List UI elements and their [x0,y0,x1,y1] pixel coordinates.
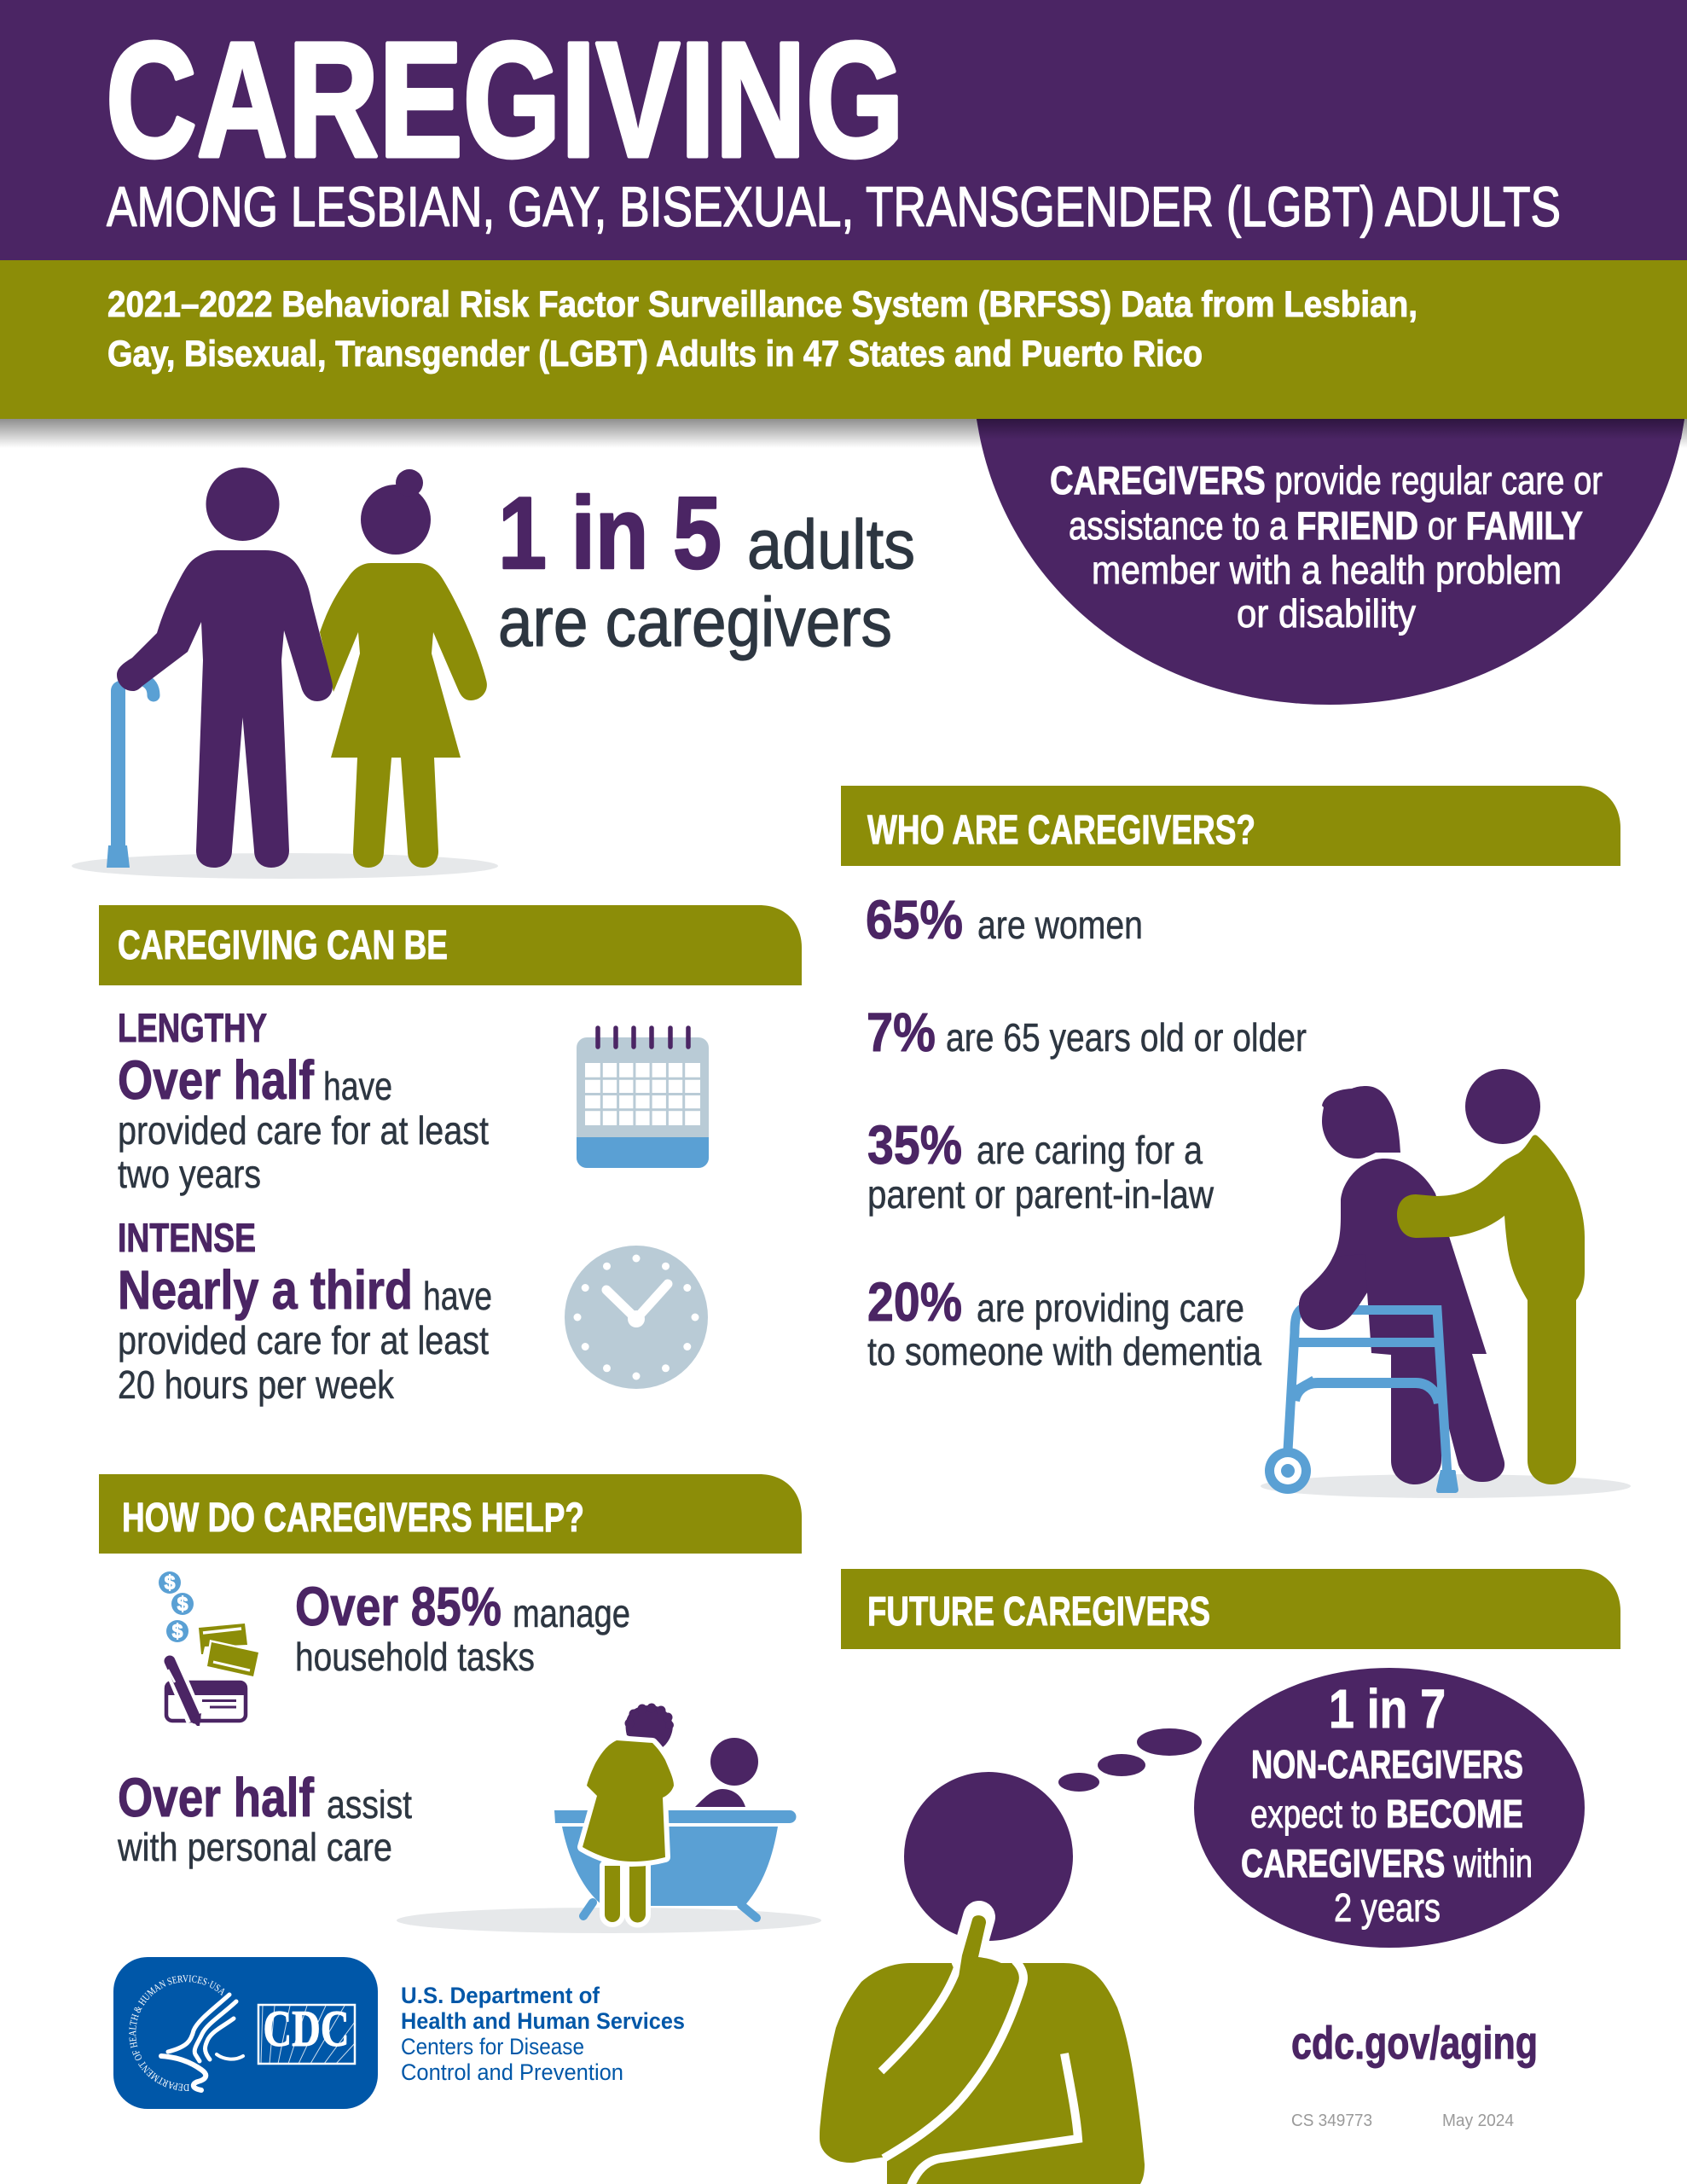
stat: 1 in 5 adults: 1 in 5 [498,476,722,590]
text block: agency names [401,1983,685,2085]
stat: 7 percent 65 or older: 7% [867,1002,936,1063]
stat: over 85 percent manage household tasks: manage [513,1591,630,1635]
icon: thinking person [820,1772,1145,2184]
stat: 35 percent caring for a parent: parent or parent-in-law [867,1172,1215,1217]
stat: 65 percent women [866,889,1143,950]
text block: agency names: U.S. Department of [401,1983,600,2008]
text block: lengthy: have [323,1064,392,1108]
website link text: cdc.gov/aging [1291,2018,1538,2069]
icon: money, cards and check: $ [177,1593,188,1615]
text block: agency names: Health and Human Services [401,2008,685,2034]
text block: lengthy [118,1005,489,1196]
publication code: CS 349773 [1291,2111,1372,2130]
text block: lengthy: two years [118,1152,261,1196]
icon: calendar [577,1028,709,1168]
text block: lengthy: provided care for at least [118,1108,489,1153]
heading: how do caregivers help [99,1474,802,1554]
heading: future caregivers: FUTURE CAREGIVERS [867,1589,1210,1635]
icon: clock [565,1246,708,1389]
heading: future caregivers [841,1569,1620,1649]
stat: 1 in 5 adults: adults [747,506,915,584]
woman figure [320,563,487,868]
stat: 65 percent women: are women [977,903,1143,947]
CDC mark: CDC [263,2001,350,2057]
panel: who are caregivers stats [866,889,1307,1374]
text block: intense: have [423,1274,492,1318]
caregiver hair [624,1703,674,1747]
heading: who are caregivers: WHO ARE CAREGIVERS? [867,808,1255,853]
icon: HHS eagle [161,1995,243,2090]
stat: 1 in 5 adults: are caregivers [498,584,892,661]
stat: 1 in 5 adults [498,476,915,661]
stat: over half assist with personal care: assist [327,1782,412,1827]
heading: how do caregivers help: HOW DO CAREGIVERS HELP? [122,1496,584,1541]
stat: 35 percent caring for a parent [867,1114,1215,1217]
stat: over half assist with personal care: with personal care [117,1825,392,1869]
stat: over 85 percent manage household tasks: household tasks [295,1635,535,1679]
stat: 20 percent dementia care: to someone with dementia [867,1329,1261,1374]
text block: lengthy: LENGTHY [118,1005,267,1050]
callout: thought bubble 1 in 7: CAREGIVERS within [1241,1841,1533,1885]
stat: over half assist with personal care [117,1767,412,1869]
heading: caregiving can be: CAREGIVING CAN BE [118,923,448,968]
panel: title banner [0,0,1687,260]
callout: thought bubble 1 in 7: expect to BECOME [1250,1792,1523,1836]
text block: intense [118,1215,492,1407]
text block: intense: Nearly a third [118,1259,413,1321]
stat: over 85 percent manage household tasks: Over 85% [295,1576,501,1637]
stat: 7 percent 65 or older [867,1002,1307,1063]
man figure [117,550,333,868]
callout: caregivers definition: CAREGIVERS provide regular care or [1050,458,1603,502]
stat: over 85 percent manage household tasks [295,1576,630,1679]
callout: thought bubble 1 in 7: NON-CAREGIVERS [1251,1742,1523,1786]
text block: intense: 20 hours per week [118,1362,395,1407]
callout: caregivers definition: assistance to a FRIEND or FAMILY [1069,503,1583,548]
data source text: 2021–2022 Behavioral Risk Factor Surveillance System (BRFSS) Data from Lesbian, [107,284,1417,325]
icon: caregiver helping person in bathtub [397,1703,821,1933]
text block: agency names: Centers for Disease [401,2034,584,2059]
heading: who are caregivers [841,786,1620,866]
callout: caregivers definition: or disability [1237,591,1416,636]
callout: thought bubble 1 in 7: 1 in 7 [1329,1678,1446,1740]
stat: 35 percent caring for a parent: 35% [867,1114,962,1176]
stat: 20 percent dementia care [867,1271,1261,1374]
seal text ring: DEPARTMENT OF HEALTH & HUMAN SERVICES·USA [129,1975,225,2091]
icon: money, cards and check: $ [165,1571,176,1594]
icon: caregiver helping person with walker [1261,1069,1631,1498]
text block: intense: provided care for at least [118,1318,489,1362]
icon: money, cards and check: $ [172,1620,183,1642]
stat: 20 percent dementia care: are providing care [977,1286,1244,1330]
panel: data source band [0,260,1687,419]
stat: 65 percent women: 65% [866,889,963,950]
stat: over half assist with personal care: Over half [118,1767,315,1828]
title: CAREGIVING [106,8,904,191]
text block: intense: INTENSE [118,1215,256,1260]
callout: caregivers definition [977,419,1684,705]
callout: caregivers definition: member with a health problem [1092,548,1562,592]
heading: caregiving can be [99,905,802,985]
stat: 35 percent caring for a parent: are caring for a [977,1128,1203,1172]
text block: lengthy: Over half [118,1049,315,1111]
callout: thought bubble 1 in 7 [1058,1668,1585,1948]
data source text: Gay, Bisexual, Transgender (LGBT) Adults in 47 States and Puerto Rico [107,334,1203,375]
data source text [107,284,1417,375]
stat: 20 percent dementia care: 20% [867,1271,962,1333]
publication date: May 2024 [1442,2111,1514,2130]
icon: older couple with cane [72,468,498,879]
icon: money, cards and check [159,1571,260,1726]
stat: 7 percent 65 or older: are 65 years old or older [946,1015,1307,1060]
callout: thought bubble 1 in 7: 2 years [1334,1885,1441,1930]
logo: HHS and CDC [113,1957,378,2109]
text block: agency names: Control and Prevention [401,2059,623,2085]
